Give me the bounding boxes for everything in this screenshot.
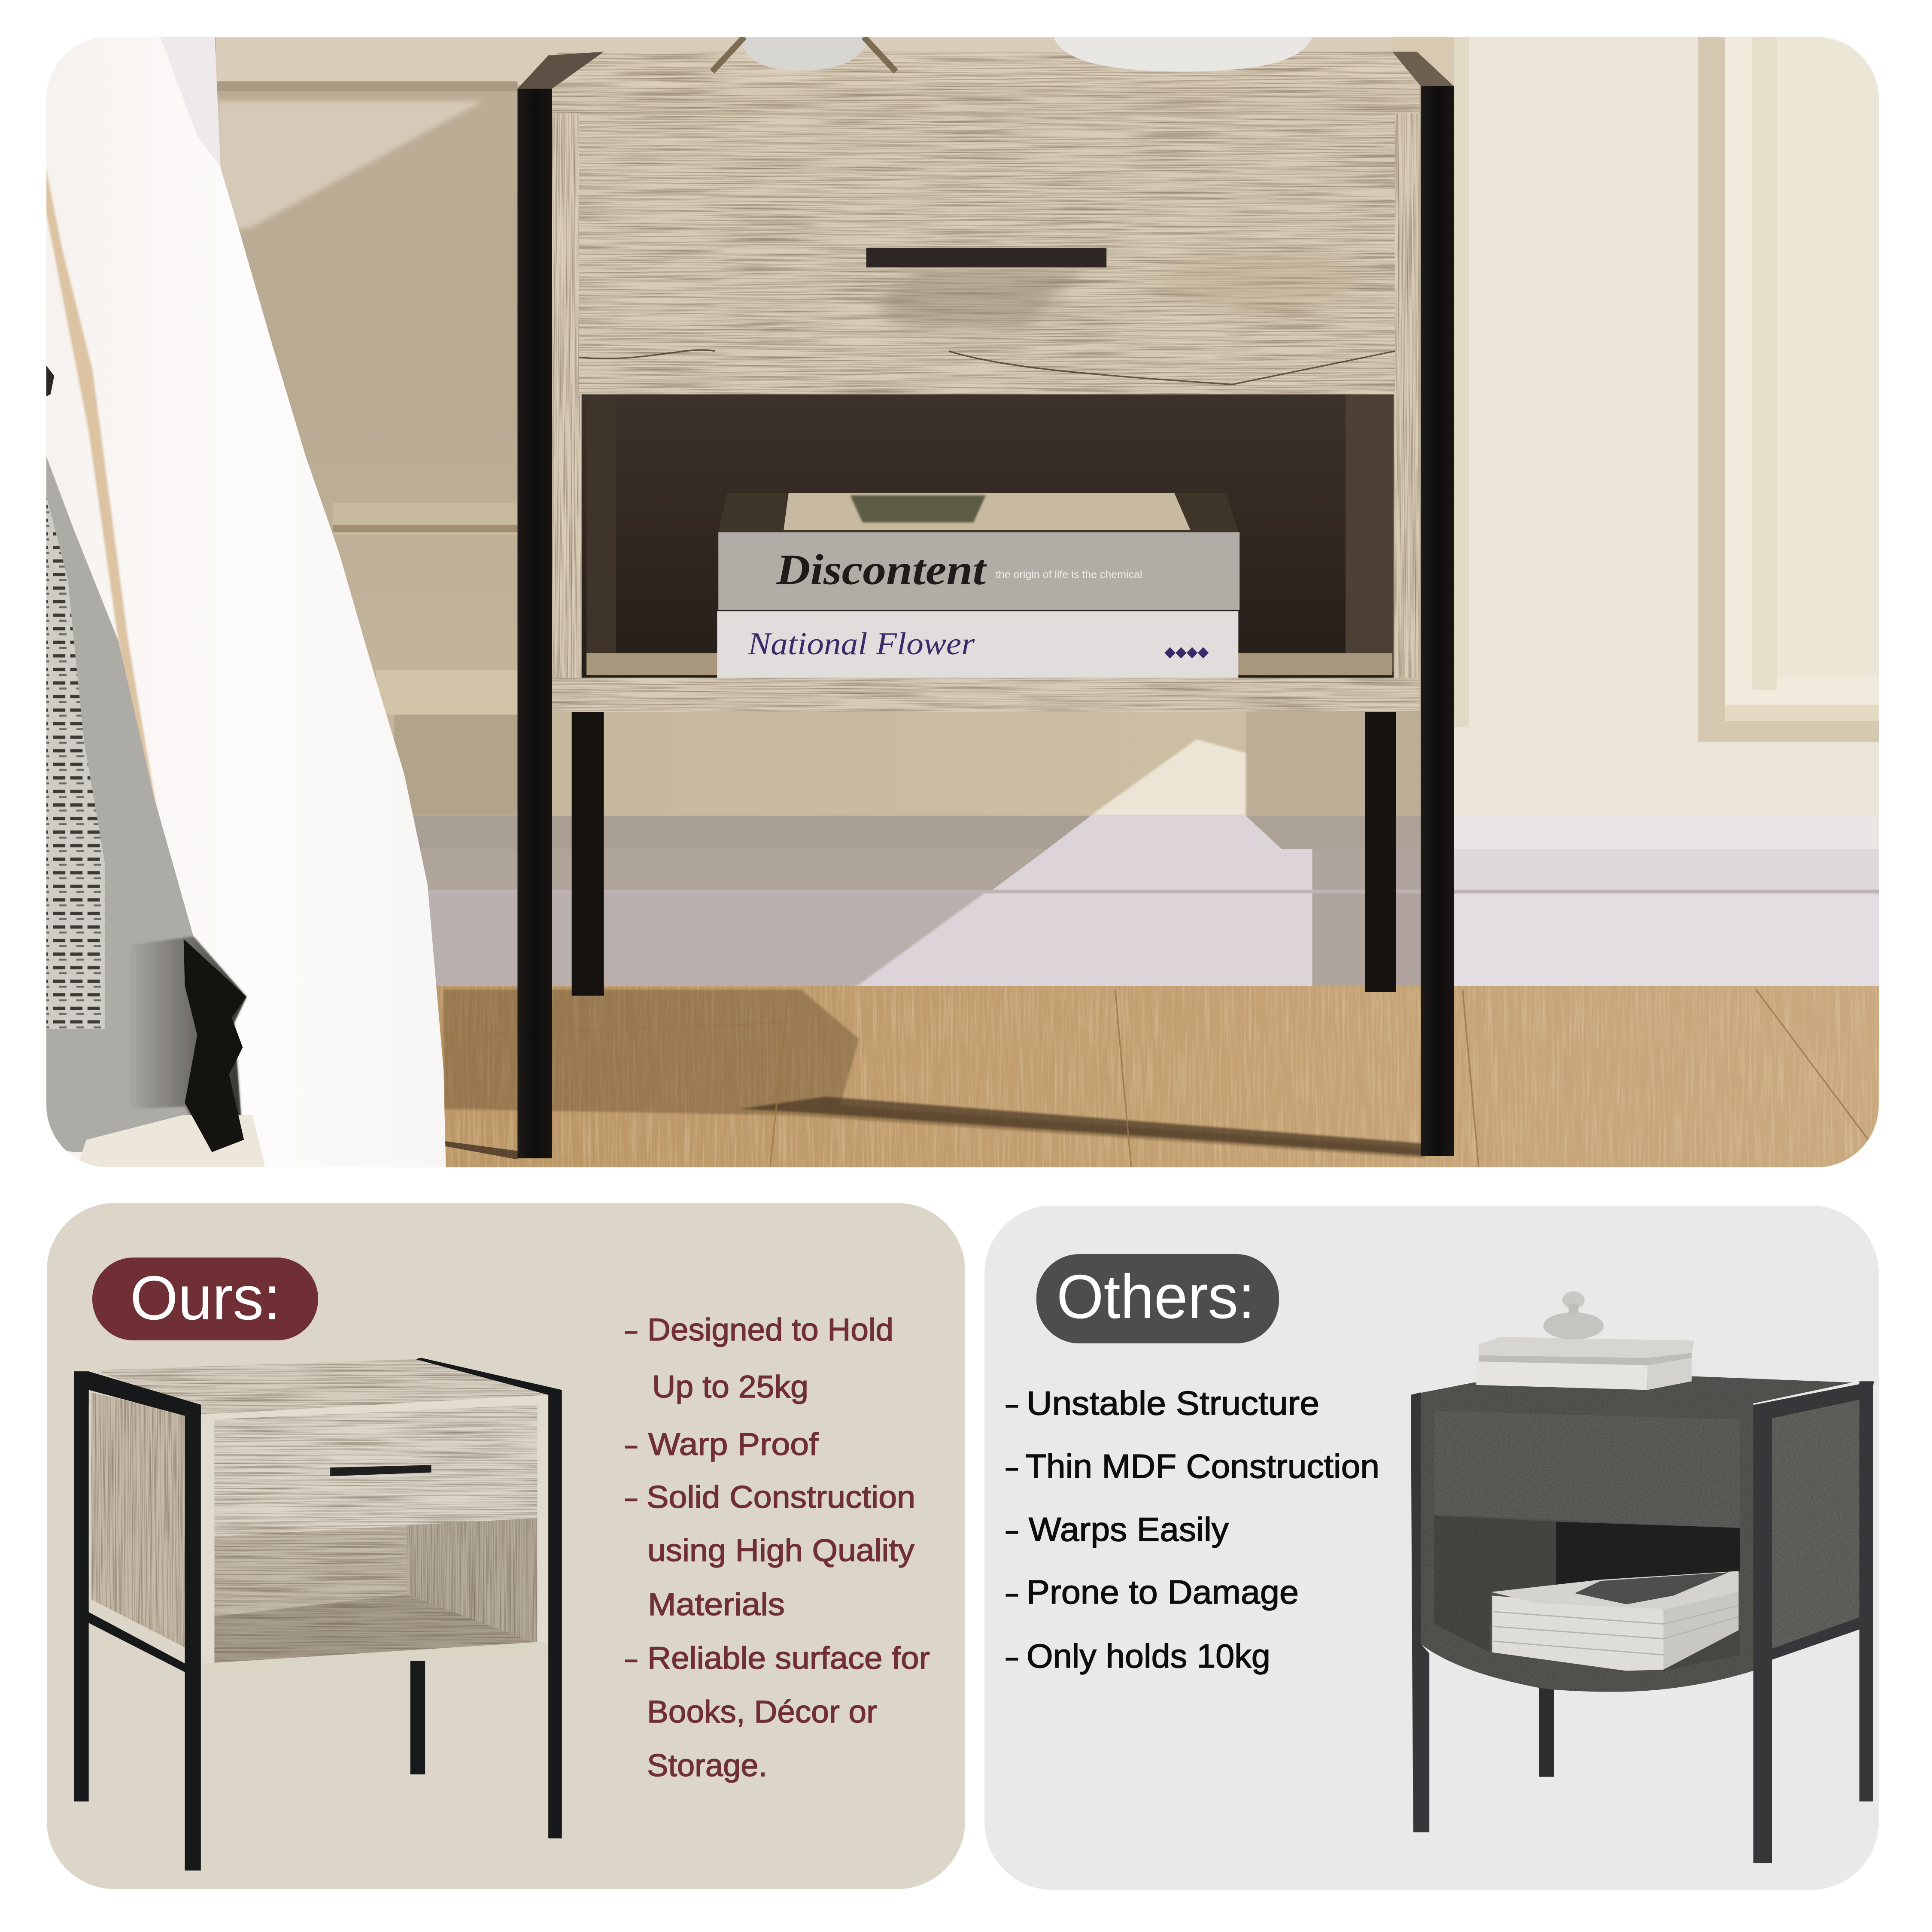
book title: Discontent bbox=[776, 545, 987, 593]
shelf interior bbox=[579, 394, 1395, 680]
badge: others: Others: bbox=[1057, 1262, 1255, 1331]
drawer handle bbox=[330, 1465, 431, 1476]
book diamonds: ◆◆◆◆ bbox=[1164, 644, 1209, 661]
side panel bbox=[91, 1392, 187, 1649]
others drawbacks list: – bbox=[1006, 1510, 1018, 1548]
ours benefits list: Warp Proof bbox=[648, 1427, 819, 1462]
ours benefits list: – bbox=[625, 1641, 637, 1676]
drawer bbox=[214, 1405, 537, 1537]
bottom shelf plate bbox=[552, 677, 1419, 712]
drawer bbox=[1434, 1411, 1740, 1528]
drawer front bbox=[579, 115, 1395, 394]
woven throw blanket bbox=[37, 365, 265, 1177]
ours benefits list: Storage. bbox=[647, 1748, 767, 1783]
others drawbacks list: Only holds 10kg bbox=[1027, 1637, 1270, 1675]
tabletop bbox=[96, 1359, 548, 1415]
baseboard bbox=[413, 816, 1885, 988]
bowl on tabletop bbox=[1054, 37, 1312, 71]
drawer handle bbox=[866, 248, 1106, 267]
stacked books bbox=[717, 493, 1239, 677]
vase on top bbox=[1543, 1291, 1604, 1340]
back leg bbox=[410, 1661, 425, 1774]
shelf interior bbox=[1434, 1516, 1740, 1671]
others drawbacks list: – bbox=[1006, 1637, 1018, 1675]
ours benefits list: using High Quality bbox=[647, 1533, 915, 1568]
panel: lifestyle photo of nightstand bbox=[37, 31, 1885, 1177]
back leg bbox=[1539, 1686, 1554, 1777]
others drawbacks list: Thin MDF Construction bbox=[1025, 1447, 1379, 1485]
badge: others bbox=[1036, 1254, 1279, 1343]
others drawbacks list: Prone to Damage bbox=[1027, 1573, 1299, 1611]
side panels bbox=[552, 113, 1419, 685]
nightstand top surface bbox=[552, 52, 1419, 113]
second book title: National Flower bbox=[747, 626, 975, 662]
black metal frame bbox=[74, 1358, 562, 1871]
panel: ours bbox=[47, 1203, 965, 1889]
others drawbacks list: – bbox=[1006, 1573, 1018, 1611]
product: competitor nightstand bbox=[1411, 1291, 1874, 1863]
wood floor bbox=[413, 986, 1885, 1170]
ours benefits list: Materials bbox=[648, 1587, 785, 1622]
metal frame bbox=[1411, 1381, 1874, 1863]
ours benefits list: Designed to Hold bbox=[647, 1312, 893, 1347]
ours benefits list: Up to 25kg bbox=[652, 1370, 808, 1404]
wall background bbox=[37, 31, 1885, 1177]
magazines on shelf bbox=[1491, 1571, 1739, 1671]
shelf opening bbox=[213, 1516, 537, 1663]
ours benefits list: – bbox=[625, 1427, 637, 1462]
badge: ours: Ours: bbox=[130, 1263, 281, 1333]
panel: others bbox=[984, 1206, 1879, 1890]
wall moulding panel bbox=[1454, 37, 1879, 742]
ornament on tabletop bbox=[712, 37, 896, 71]
book tagline: the origin of life is the chemical bbox=[996, 569, 1142, 580]
top edge bbox=[204, 1395, 548, 1422]
others drawbacks list bbox=[1006, 1384, 1379, 1675]
others drawbacks list: Unstable Structure bbox=[1027, 1384, 1319, 1422]
others drawbacks list: – bbox=[1006, 1384, 1018, 1422]
others drawbacks list: Warps Easily bbox=[1029, 1510, 1229, 1548]
side panel bbox=[1765, 1390, 1865, 1656]
ours benefits list bbox=[625, 1312, 930, 1783]
black front legs bbox=[517, 52, 1454, 1158]
carcass strips bbox=[201, 1397, 550, 1673]
books on top bbox=[1476, 1337, 1694, 1390]
ours benefits list: Solid Construction bbox=[647, 1480, 915, 1515]
others drawbacks list: – bbox=[1006, 1447, 1018, 1485]
ours benefits list: – bbox=[625, 1480, 637, 1515]
ours benefits list: – bbox=[625, 1312, 637, 1347]
badge: ours bbox=[92, 1258, 318, 1340]
back legs bbox=[572, 712, 1396, 996]
bed sheet bbox=[37, 31, 446, 1177]
product: our nightstand bbox=[74, 1358, 562, 1871]
cabinet body and tabletop bbox=[1417, 1376, 1852, 1692]
ours benefits list: Books, Décor or bbox=[647, 1695, 877, 1729]
ours benefits list: Reliable surface for bbox=[647, 1641, 930, 1676]
